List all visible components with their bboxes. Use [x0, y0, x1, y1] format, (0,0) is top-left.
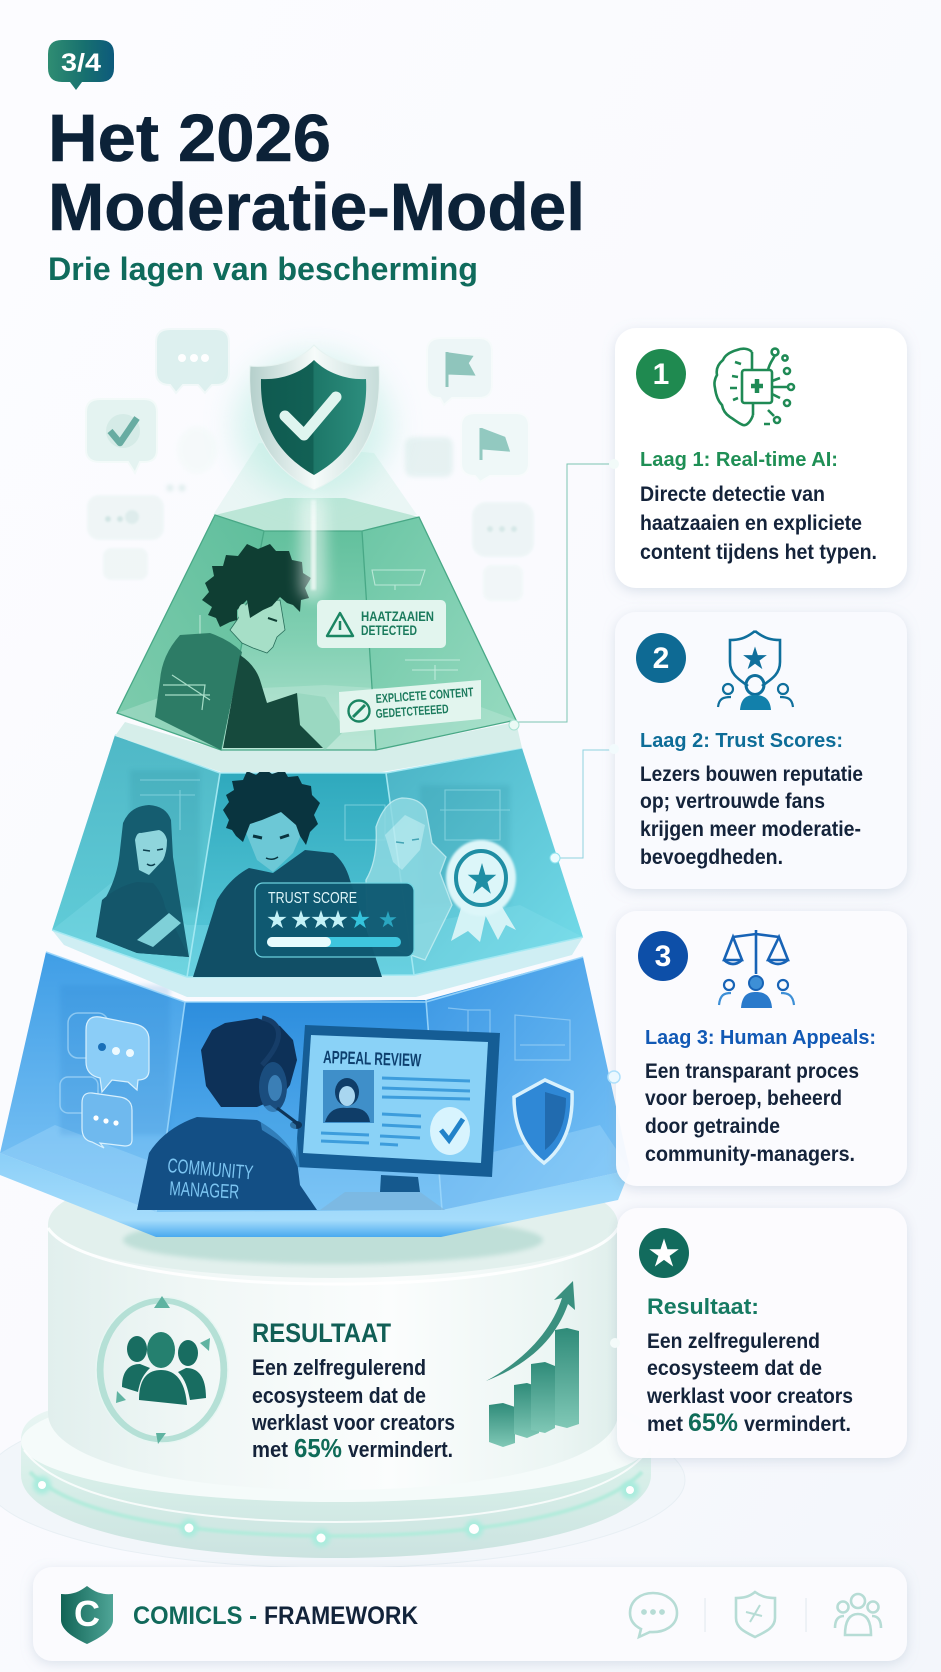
body card 4 — [646, 1330, 853, 1437]
number circle 2 — [636, 633, 686, 683]
shelf under layer 2 — [52, 930, 583, 997]
connector layer 2 — [550, 750, 615, 863]
pedestal lower base — [21, 1382, 651, 1558]
body card 1: content tijdens het typen. — [640, 541, 877, 564]
ground disk and pedestal — [0, 1170, 685, 1568]
pedestal top face — [48, 1170, 618, 1278]
pedestal result text: ecosysteem dat de — [252, 1383, 426, 1408]
alert: expliciete content: GEDETCTEEEED — [375, 702, 449, 721]
progress badge 3/4 — [48, 40, 114, 90]
icon: C shield logo — [61, 1586, 113, 1644]
footer bar — [33, 1567, 907, 1661]
body card 4: 65% — [688, 1409, 738, 1437]
alert: haatzaaien detected: HAATZAAIEN — [361, 609, 434, 624]
pyramid layer 2: trust scores — [52, 735, 583, 977]
icon: shield — [736, 1592, 775, 1637]
framework label: FRAMEWORK — [264, 1602, 418, 1630]
body card 3: door getrainde — [645, 1115, 780, 1138]
body card 2 — [640, 763, 863, 869]
connector layer 1 — [509, 464, 615, 730]
icon: chat — [630, 1593, 677, 1637]
pyramid layer 1: real-time AI — [117, 443, 516, 750]
alert: haatzaaien detected — [317, 600, 446, 648]
pedestal result text: 65% — [294, 1433, 342, 1463]
framework label — [133, 1602, 418, 1630]
top plate — [215, 498, 419, 531]
body card 2: op; vertrouwde fans — [640, 790, 825, 813]
community manager figure: COMMUNITY — [167, 1155, 254, 1184]
number circle 3: 3 — [655, 940, 671, 973]
faint mid bubbles — [167, 426, 453, 491]
result ring icon — [96, 1296, 228, 1444]
bubble: flag two — [461, 413, 529, 482]
icon: people — [835, 1594, 881, 1635]
body card 4: ecosysteem dat de — [647, 1357, 822, 1380]
body card 1 — [640, 483, 877, 564]
light cone — [213, 443, 417, 515]
body card 3 — [645, 1060, 859, 1166]
heading card 4: Resultaat: — [647, 1294, 759, 1319]
body card 3: community-managers. — [645, 1143, 855, 1166]
body card 3: voor beroep, beheerd — [645, 1087, 842, 1110]
layer 3 glass facets — [0, 952, 630, 1237]
shield in layer 3 — [514, 1080, 572, 1163]
faint bubble right — [472, 502, 534, 601]
title: Moderatie-Model — [48, 170, 585, 245]
pedestal result text: werklast voor creators — [251, 1410, 455, 1435]
pyramid layer 3: human appeals — [0, 952, 630, 1237]
body card 2: krijgen meer moderatie- — [640, 818, 861, 841]
icon: scales with people — [719, 930, 794, 1008]
sketch window lines layer 1 — [200, 570, 460, 680]
alert: haatzaaien detected: DETECTED — [361, 623, 417, 638]
title — [48, 101, 585, 245]
framework label: COMICLS - — [133, 1602, 257, 1630]
monitor: APPEAL REVIEW — [323, 1047, 421, 1070]
icon: AI brain chip — [714, 349, 794, 425]
community manager figure — [137, 1018, 317, 1210]
layer 1 glass facets — [117, 515, 516, 750]
body card 2: Lezers bouwen reputatie — [640, 763, 863, 786]
card 4: resultaat — [610, 1208, 907, 1458]
pedestal result text: vermindert. — [348, 1437, 453, 1462]
connector lines — [509, 464, 615, 863]
pedestal result text: met — [252, 1437, 289, 1462]
people icon — [122, 1332, 206, 1405]
alert: expliciete content — [339, 680, 481, 733]
card 2: trust scores — [609, 612, 907, 889]
body card 1: haatzaaien en expliciete — [640, 512, 862, 535]
bubble: flag one — [427, 338, 492, 405]
pedestal cylinder — [48, 1225, 618, 1490]
monitor — [295, 1025, 500, 1210]
heading card 3: Laag 3: Human Appeals: — [645, 1027, 876, 1049]
card 1: real-time AI — [609, 328, 907, 588]
layer 2 glass facets — [52, 735, 583, 977]
chat bubbles in layer 3 — [60, 1013, 149, 1148]
star circle — [639, 1228, 689, 1278]
body card 4: met — [647, 1413, 683, 1436]
floating moderation bubbles — [86, 329, 534, 601]
body card 3: Een transparant proces — [645, 1060, 859, 1083]
title: Het 2026 — [48, 101, 331, 176]
growth bar chart icon — [486, 1281, 579, 1447]
typing boy figure — [155, 544, 345, 750]
award medal — [446, 840, 516, 942]
bubble: check — [86, 399, 157, 473]
body card 4: werklast voor creators — [646, 1385, 853, 1408]
body card 4: Een zelfregulerend — [647, 1330, 820, 1353]
icon: C shield logo: C — [74, 1593, 100, 1634]
number circle 3 — [638, 931, 688, 981]
trust score panel: TRUST SCORE — [268, 890, 357, 907]
sketch window lines layer 3 — [448, 1008, 570, 1060]
alert: expliciete content: EXPLICETE CONTENT — [375, 685, 474, 706]
blonde girl figure — [366, 798, 452, 960]
shelf under layer 1 — [115, 722, 522, 772]
body card 4: vermindert. — [744, 1413, 851, 1436]
number circle 2: 2 — [653, 642, 669, 675]
number circle 1 — [636, 349, 686, 399]
bubble: dots — [156, 329, 229, 393]
base lights — [33, 1476, 639, 1547]
pedestal result text — [251, 1318, 455, 1463]
icon: shield with people — [718, 631, 793, 710]
sketch window lines layer 2 — [140, 780, 510, 840]
progress badge 3/4: 3/4 — [61, 49, 101, 77]
pedestal result text: Een zelfregulerend — [252, 1355, 426, 1380]
number circle 1: 1 — [653, 358, 669, 391]
subtitle: Drie lagen van bescherming — [48, 251, 478, 287]
trust score panel — [255, 883, 414, 957]
faint bubble left — [87, 495, 164, 580]
shield emblem — [235, 345, 391, 497]
ground disk — [0, 1392, 685, 1568]
pedestal result text: RESULTAAT — [252, 1318, 391, 1348]
card 3: human appeals — [608, 911, 907, 1186]
body card 2: bevoegdheden. — [640, 846, 783, 869]
heading card 2: Laag 2: Trust Scores: — [640, 730, 843, 752]
girl left figure — [96, 805, 189, 957]
community manager figure: MANAGER — [169, 1178, 240, 1204]
main boy figure — [193, 768, 382, 977]
body card 1: Directe detectie van — [640, 483, 825, 506]
light beam — [300, 490, 326, 600]
heading card 1: Laag 1: Real-time AI: — [640, 449, 838, 471]
